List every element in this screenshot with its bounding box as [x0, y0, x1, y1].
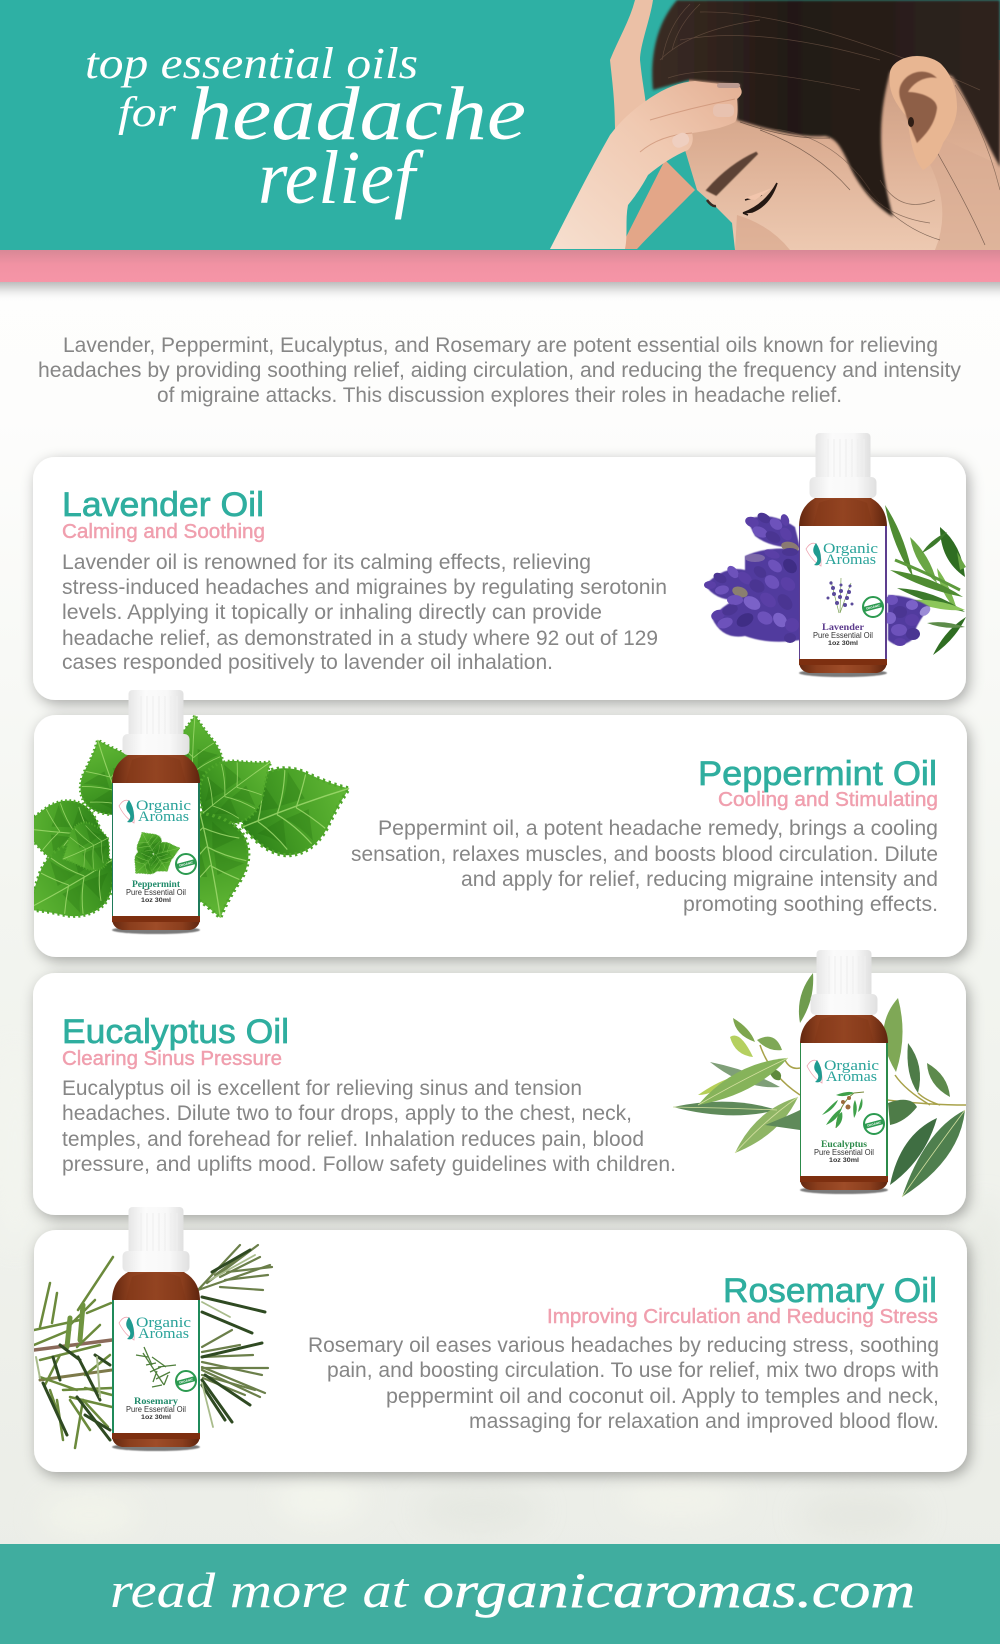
footer call to action: organicaromas.com — [423, 1562, 915, 1618]
intro paragraph: Lavender, Peppermint, Eucalyptus, and Rosemary are potent essential oils known for relieving — [63, 333, 938, 357]
body text: peppermint — [351, 816, 938, 916]
icon: organic seal: ORGANIC — [179, 1377, 194, 1385]
heading: peppermint oil: Peppermint Oil — [698, 755, 937, 793]
icon: lavender flowers and rosemary sprig — [704, 505, 966, 655]
body text: eucalyptus: Eucalyptus oil is excellent for relieving sinus and tension — [62, 1076, 582, 1100]
body text: peppermint: promoting soothing effects. — [683, 892, 938, 916]
body text: rosemary: massaging for relaxation and improved blood flow. — [469, 1409, 939, 1433]
icon: rosemary bottle: 1oz 30ml — [141, 1414, 171, 1421]
icon: rosemary bottle: Aromas — [138, 1326, 189, 1342]
icon: eucalyptus bottle: Organic — [824, 1058, 879, 1074]
body text: rosemary: pain, and boosting circulation. To use for relief, mix two drops with — [327, 1358, 939, 1382]
icon: peppermint bottle: 1oz 30ml — [141, 897, 171, 904]
panel: lavender oil — [33, 433, 966, 700]
title: for — [118, 90, 177, 136]
body text: peppermint: and apply for relief, reducing migraine intensity and — [461, 867, 938, 891]
body text: lavender: levels. Applying it topically or inhaling directly can provide — [62, 600, 602, 624]
icon: rosemary bottle: Rosemary — [134, 1397, 178, 1407]
icon: peppermint bottle — [112, 690, 200, 934]
icon: organic seal: ORGANIC — [867, 1120, 882, 1128]
icon: peppermint bottle: Peppermint — [132, 880, 181, 890]
icon: organic seal — [176, 1371, 196, 1391]
icon: lavender bottle: Organic — [823, 541, 878, 557]
icon: peppermint leaves — [34, 715, 350, 918]
icon: lavender bottle: Lavender — [822, 623, 865, 633]
body text: eucalyptus: temples, and forehead for relief. Inhalation reduces pain, blood — [62, 1127, 644, 1151]
photo: woman with headache — [550, 0, 1000, 250]
heading: eucalyptus oil: Eucalyptus Oil — [62, 1013, 289, 1051]
icon: rosemary bottle: Organic — [136, 1315, 191, 1331]
icon: lavender bottle: 1oz 30ml — [828, 640, 858, 647]
heading: lavender oil: Lavender Oil — [62, 486, 264, 524]
body text: eucalyptus: pressure, and uplifts mood. Follow safety guidelines with children. — [62, 1152, 676, 1176]
panel: peppermint oil — [7, 690, 967, 957]
body text: rosemary — [308, 1333, 939, 1433]
body text: eucalyptus — [62, 1076, 676, 1176]
icon: lavender bottle — [799, 433, 887, 677]
heading: rosemary oil: Rosemary Oil — [723, 1272, 937, 1310]
icon: eucalyptus bottle: Pure Essential Oil — [814, 1148, 874, 1157]
body text: peppermint: Peppermint oil, a potent headache remedy, brings a cooling — [378, 816, 938, 840]
icon: lavender bottle: Pure Essential Oil — [813, 631, 873, 640]
panel: rosemary oil — [34, 1207, 967, 1472]
subheading: calming: Calming and Soothing — [62, 521, 265, 543]
title: headache — [188, 72, 526, 156]
footer banner — [0, 1544, 1000, 1644]
icon: eucalyptus bottle: Eucalyptus — [821, 1140, 867, 1150]
icon: peppermint bottle: Organic — [136, 798, 191, 814]
icon: eucalyptus bottle: Aromas — [826, 1069, 877, 1085]
body text: rosemary: peppermint oil and coconut oil. Apply to temples and neck, — [386, 1384, 939, 1408]
footer call to action — [110, 1562, 915, 1618]
icon: organic seal — [863, 597, 883, 617]
body text: lavender: stress-induced headaches and migraines by regulating serotonin — [62, 575, 667, 599]
body text: lavender: cases responded positively to lavender oil inhalation. — [62, 650, 553, 674]
body text: lavender: Lavender oil is renowned for its calming effects, relieving — [62, 550, 591, 574]
subheading: circulation: Improving Circulation and Reducing Stress — [547, 1306, 938, 1328]
pink band — [0, 250, 1000, 282]
subheading: sinus: Clearing Sinus Pressure — [62, 1048, 282, 1070]
icon: organic seal: ORGANIC — [179, 860, 194, 868]
header banner — [0, 0, 1000, 302]
icon: lavender bottle: Aromas — [825, 552, 876, 568]
icon: rosemary sprigs — [34, 1245, 272, 1448]
icon: rosemary bottle: Pure Essential Oil — [126, 1405, 186, 1414]
body text: peppermint: sensation, relaxes muscles, and boosts blood circulation. Dilute — [351, 842, 938, 866]
subheading: cooling: Cooling and Stimulating — [718, 789, 938, 811]
intro paragraph — [38, 333, 961, 407]
body text: rosemary: Rosemary oil eases various headaches by reducing stress, soothing — [308, 1333, 939, 1357]
icon: eucalyptus bottle: 1oz 30ml — [829, 1157, 859, 1164]
panel: eucalyptus oil — [33, 950, 966, 1215]
title: top essential oils — [85, 39, 418, 88]
icon: peppermint bottle: Pure Essential Oil — [126, 888, 186, 897]
icon: organic seal: ORGANIC — [866, 603, 881, 611]
title: relief — [258, 136, 424, 220]
title — [85, 39, 526, 220]
intro paragraph: of migraine attacks. This discussion explores their roles in headache relief. — [157, 383, 842, 407]
icon: rosemary bottle — [112, 1207, 200, 1451]
footer call to action: read more at — [110, 1562, 409, 1618]
icon: organic seal — [864, 1114, 884, 1134]
body text: eucalyptus: headaches. Dilute two to four drops, apply to the chest, neck, — [62, 1101, 632, 1125]
icon: peppermint bottle: Aromas — [138, 809, 189, 825]
icon: organic seal — [176, 854, 196, 874]
icon: eucalyptus branch — [673, 973, 966, 1197]
body text: lavender: headache relief, as demonstrated in a study where 92 out of 129 — [62, 626, 658, 650]
intro paragraph: headaches by providing soothing relief, aiding circulation, and reducing the frequency and intensity — [38, 358, 961, 382]
body text: lavender — [62, 550, 667, 674]
icon: eucalyptus bottle — [800, 950, 888, 1194]
